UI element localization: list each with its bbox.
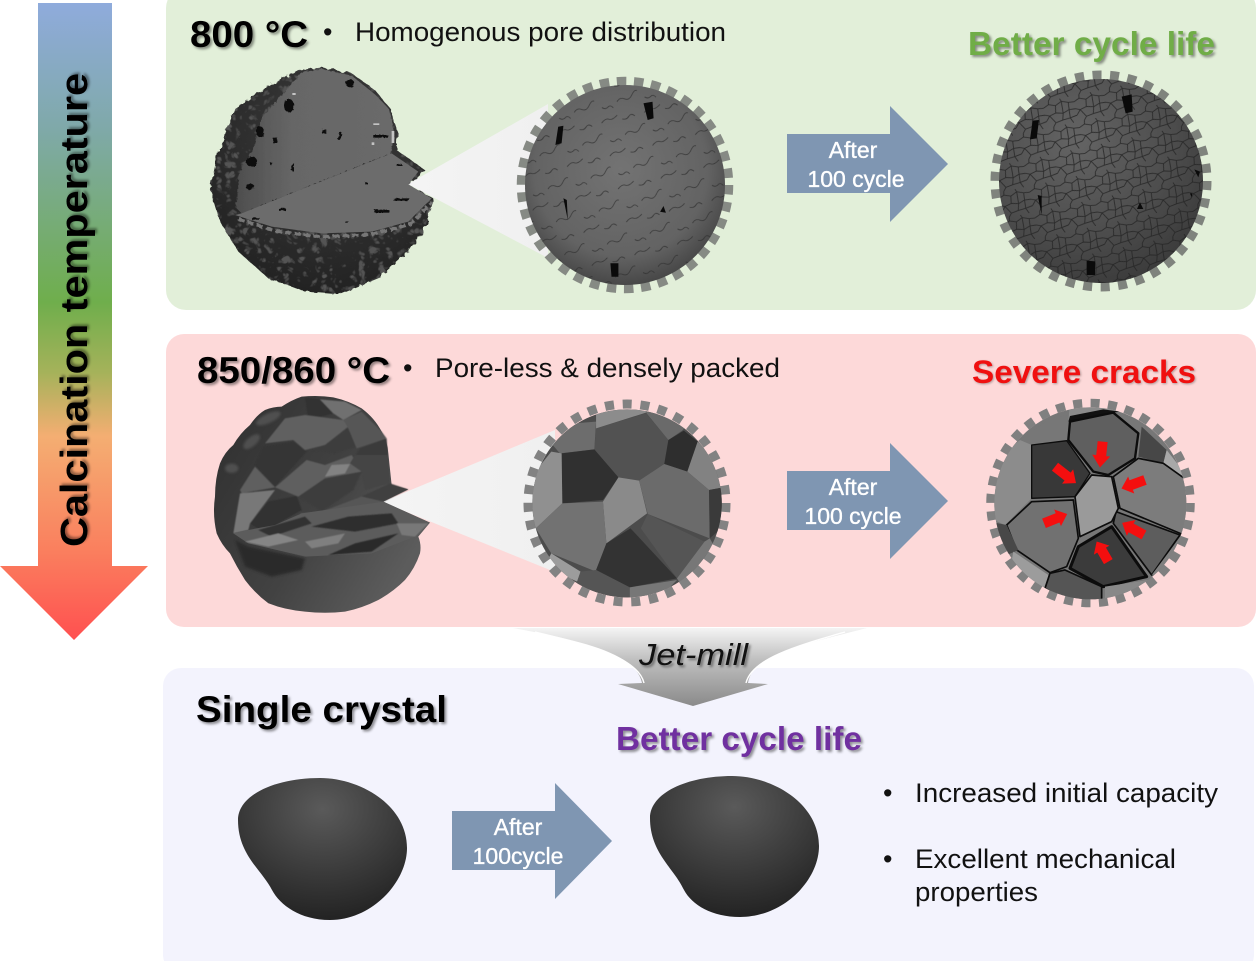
circle: porous grain zoom xyxy=(522,82,728,288)
arrow: after 100 cycle (panel 2): 100 cycle xyxy=(804,503,902,529)
arrow: after 100cycle (single crystal): 100cycle xyxy=(473,843,563,869)
circle: severe cracks xyxy=(987,403,1190,603)
text: pore-less and densely packed: Pore-less & densely packed xyxy=(435,353,780,383)
arrow: after 100 cycle (panel 1) xyxy=(787,106,948,222)
magnification cone: panel 1 xyxy=(408,104,548,258)
lower cut face xyxy=(233,502,430,557)
heading: better cycle life (green): Better cycle life xyxy=(968,25,1215,62)
arrow: calcination temperature gradient xyxy=(0,3,148,640)
light flecks xyxy=(292,93,394,145)
circle: fine cracks after cycling xyxy=(995,75,1207,287)
circle: dense grains zoom xyxy=(524,404,727,603)
cracked grains xyxy=(987,403,1190,603)
bullet list: single crystal benefits xyxy=(883,778,1219,907)
particle: single crystal after xyxy=(650,776,819,917)
label: jet-mill: Jet-mill xyxy=(638,637,749,672)
rim chunks xyxy=(238,202,432,237)
surface facets xyxy=(233,397,408,533)
teeth xyxy=(995,75,1207,287)
arrow: after 100cycle (single crystal): After xyxy=(494,814,543,840)
particle: dense polycrystal cross-section xyxy=(214,396,430,613)
arrow: after 100 cycle (panel 2): After xyxy=(829,474,878,500)
grains xyxy=(532,409,722,598)
crack network xyxy=(999,79,1203,283)
panel: single crystal xyxy=(163,668,1254,961)
cut face: back xyxy=(237,69,394,213)
particle: single crystal before xyxy=(238,778,407,920)
bullet list: single crystal benefits: properties xyxy=(915,877,1038,907)
label: calcination temperature: Calcination temperature xyxy=(54,73,96,547)
bullet list: single crystal benefits: Increased initial capacity xyxy=(915,778,1219,808)
heading: severe cracks: Severe cracks xyxy=(972,354,1196,390)
particle: porous sphere cross-section xyxy=(210,68,433,294)
text: pore-less and densely packed: • xyxy=(403,353,412,383)
panel: 800 °C xyxy=(166,0,1256,310)
heading: 850/860 °C: 850/860 °C xyxy=(197,350,390,391)
teeth xyxy=(528,404,726,602)
pores xyxy=(246,79,409,223)
red arrows xyxy=(1041,441,1148,566)
cut face: bottom xyxy=(235,153,432,233)
arrow: after 100 cycle (panel 2) xyxy=(787,443,948,559)
magnification cone: panel 2 xyxy=(382,430,555,572)
pores xyxy=(555,102,666,277)
heading: single crystal: Single crystal xyxy=(196,689,447,730)
text: homogenous pore distribution: Homogenous pore distribution xyxy=(355,17,726,47)
left lobes xyxy=(225,408,282,473)
text: homogenous pore distribution: • xyxy=(323,17,332,47)
pores xyxy=(1030,94,1200,275)
heading: better cycle life (purple): Better cycle life xyxy=(616,720,862,757)
shadow below cut xyxy=(235,540,305,577)
teeth xyxy=(990,403,1190,603)
arrow: after 100 cycle (panel 1): 100 cycle xyxy=(807,166,905,192)
disk xyxy=(999,79,1203,283)
heading: 800 °C: 800 °C xyxy=(190,14,308,55)
bullet list: single crystal benefits: • xyxy=(883,778,892,808)
disk xyxy=(525,85,725,285)
cracks xyxy=(525,85,725,285)
panel: 850/860 °C xyxy=(166,334,1256,627)
arrow: after 100 cycle (panel 1): After xyxy=(829,137,878,163)
bullet list: single crystal benefits: • xyxy=(883,844,892,874)
teeth xyxy=(522,82,728,288)
arrow: after 100cycle (single crystal) xyxy=(452,783,612,899)
arrow: jet-mill xyxy=(513,628,867,706)
bullet list: single crystal benefits: Excellent mechanical xyxy=(915,844,1176,874)
